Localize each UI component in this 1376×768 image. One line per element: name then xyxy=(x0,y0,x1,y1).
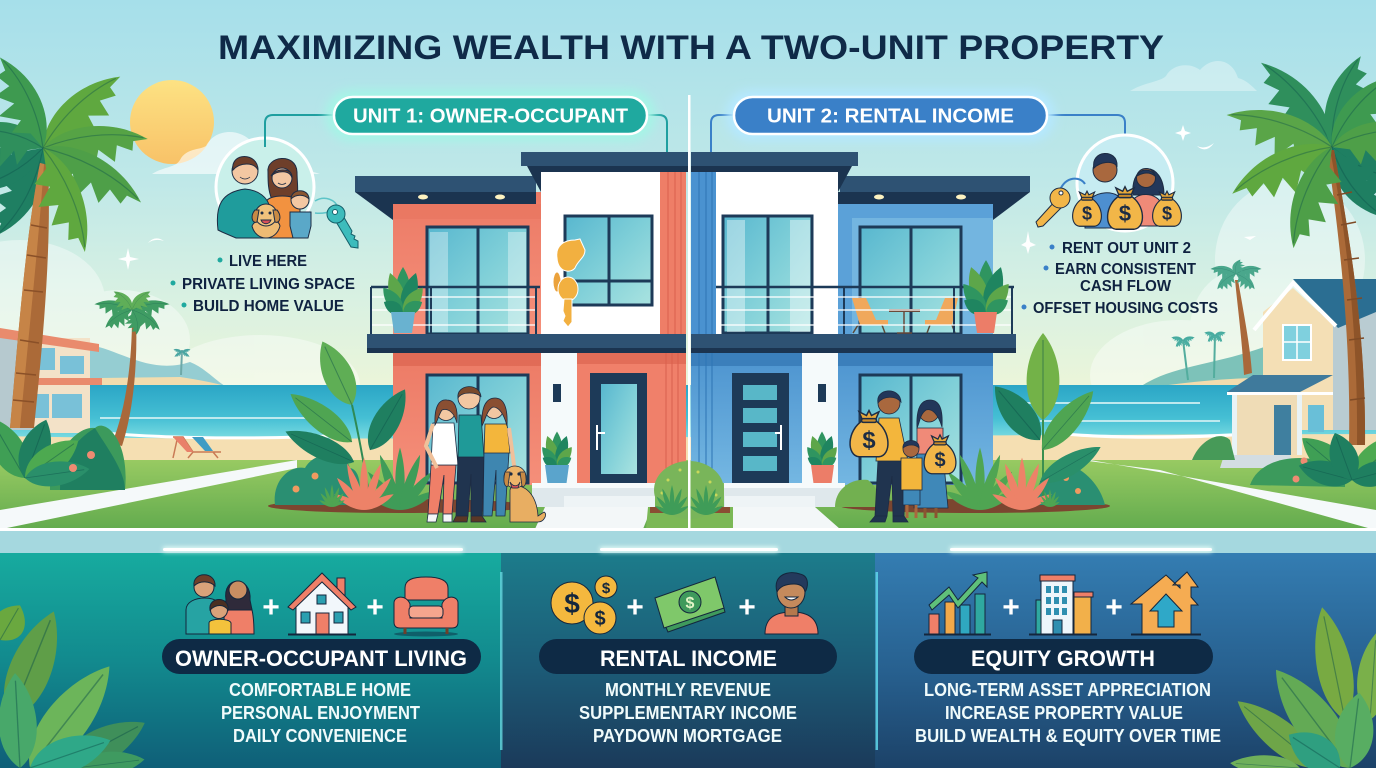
right bag xyxy=(1153,191,1181,226)
ocean xyxy=(0,385,1376,440)
unit 2 walls xyxy=(691,170,993,485)
money bag right xyxy=(924,435,956,474)
right house xyxy=(1220,279,1376,468)
unit 1 entry plant xyxy=(538,432,576,487)
distant hills xyxy=(90,345,1267,392)
callout: unit 1 circle xyxy=(216,138,314,238)
icon: house with up arrow xyxy=(1131,572,1201,634)
unit 1 balcony railing xyxy=(371,287,540,334)
heading pill: owner-occupant living xyxy=(162,639,481,674)
text block: owner benefits xyxy=(221,680,420,746)
plus: + xyxy=(262,591,280,624)
small palm left xyxy=(93,286,171,446)
callout: unit 2 circle xyxy=(1073,135,1173,231)
wall light unit 2 xyxy=(818,384,826,402)
plus: + xyxy=(738,591,756,624)
sun xyxy=(130,80,214,164)
icon: gold key xyxy=(1036,179,1085,227)
unit 2 balcony plant xyxy=(957,260,1015,333)
unit 2 lower window xyxy=(860,375,961,483)
plus: + xyxy=(626,591,644,624)
text block: unit 1 bullets xyxy=(170,253,355,315)
woman portrait right xyxy=(1130,168,1164,226)
label pill: unit 1: UNIT 1: OWNER-OCCUPANT xyxy=(353,106,628,128)
icon: person xyxy=(765,573,818,634)
panel: equity growth xyxy=(875,553,1376,768)
heading pill: rental income: RENTAL INCOME xyxy=(600,646,777,671)
heading pill: equity growth: EQUITY GROWTH xyxy=(971,646,1155,671)
unit 2 upper windows xyxy=(723,216,961,334)
panel: owner-occupant living xyxy=(0,553,501,768)
heading pill: owner-occupant living: OWNER-OCCUPANT LIVING xyxy=(175,646,467,671)
text block: unit 2 bullets: RENT OUT UNIT 2 xyxy=(1062,240,1191,257)
balcony slab xyxy=(367,334,686,353)
panel separators and glow bars xyxy=(163,547,1212,750)
illustration: owner family with dog xyxy=(426,387,546,522)
title: MAXIMIZING WEALTH WITH A TWO-UNIT PROPERTY xyxy=(218,29,1164,67)
text block: equity benefits: BUILD WEALTH & EQUITY OVER TIME xyxy=(915,726,1221,746)
text block: equity benefits: INCREASE PROPERTY VALUE xyxy=(945,703,1183,723)
text block: unit 2 bullets: EARN CONSISTENT xyxy=(1055,261,1196,278)
unit 1 walls xyxy=(393,170,686,485)
beach xyxy=(0,434,1376,470)
unit 1 upper windows xyxy=(427,216,652,334)
unit 2 door xyxy=(732,373,789,483)
golden dog xyxy=(504,466,546,522)
leaves bottom right xyxy=(1228,604,1376,768)
left hotel building xyxy=(0,328,102,433)
big palm left xyxy=(0,49,151,428)
text block: owner benefits: COMFORTABLE HOME xyxy=(229,680,411,700)
text block: equity benefits: LONG-TERM ASSET APPRECIATION xyxy=(924,680,1211,700)
sparkles and birds xyxy=(118,125,1256,270)
background sky xyxy=(0,0,1376,400)
unit 2 balcony railing xyxy=(716,287,1014,334)
woman in coral top xyxy=(914,400,948,518)
label pill: unit 1 xyxy=(326,90,655,141)
plus: + xyxy=(1002,591,1020,624)
text block: unit 1 bullets: PRIVATE LIVING SPACE xyxy=(182,276,355,293)
icon: family xyxy=(186,575,254,634)
plus: + xyxy=(1105,591,1123,624)
child xyxy=(901,440,922,518)
unit 1 balcony plant xyxy=(378,267,428,333)
unit 1 roof xyxy=(355,152,688,220)
icon: banknotes: $ xyxy=(686,595,695,612)
right foreground foliage xyxy=(1192,436,1345,487)
icon: teal key xyxy=(315,198,358,248)
man in yellow shirt xyxy=(870,391,908,522)
panel: house unit 2 xyxy=(691,152,1030,487)
illustration: renter family with money bags xyxy=(850,391,948,522)
icon: banknotes xyxy=(655,577,725,632)
heading pill: equity growth xyxy=(914,639,1213,674)
panel: rental income xyxy=(501,553,875,768)
icon: buildings xyxy=(1029,575,1097,634)
text block: unit 1 bullets: BUILD HOME VALUE xyxy=(193,298,344,315)
leaves bottom left xyxy=(0,598,153,768)
text block: owner benefits: DAILY CONVENIENCE xyxy=(233,726,407,746)
balcony table and chairs xyxy=(852,298,958,333)
label pill: unit 2: UNIT 2: RENTAL INCOME xyxy=(767,106,1014,128)
icon: coins: $ xyxy=(564,588,580,619)
man portrait xyxy=(217,156,270,238)
icon: coins: $ xyxy=(594,608,606,630)
text block: equity benefits xyxy=(915,680,1221,746)
right palm base foliage xyxy=(1293,423,1376,492)
balcony slab xyxy=(691,334,1016,353)
icon: bar chart with arrow xyxy=(924,572,991,634)
unit 1 lower window xyxy=(427,375,528,483)
plus: + xyxy=(366,591,384,624)
icon: coins: $ xyxy=(602,580,611,597)
text block: rental benefits xyxy=(579,680,797,746)
connector lines unit 1 xyxy=(265,115,667,152)
baby portrait xyxy=(290,191,311,238)
unit 2 entry plant xyxy=(803,432,841,487)
planting bed right xyxy=(835,333,1110,514)
grass xyxy=(0,460,1376,530)
text block: rental benefits: PAYDOWN MORTGAGE xyxy=(593,726,782,746)
background clouds xyxy=(0,61,1365,435)
unit 2 roof xyxy=(691,152,1030,220)
left foreground foliage xyxy=(0,410,126,490)
heading pill: rental income xyxy=(539,639,837,674)
text block: unit 2 bullets: CASH FLOW xyxy=(1080,278,1172,295)
text block: owner benefits: PERSONAL ENJOYMENT xyxy=(221,703,420,723)
woman in yellow shirt xyxy=(482,398,516,516)
small palm right xyxy=(1209,258,1263,375)
planting bed left xyxy=(268,335,532,514)
gold key on facade xyxy=(553,239,585,327)
center divider xyxy=(688,95,690,530)
unit 1 door xyxy=(590,373,647,483)
wall light unit 1 xyxy=(553,384,561,402)
dog portrait xyxy=(252,204,280,238)
central bush xyxy=(646,461,733,529)
panel: house unit 1 xyxy=(355,152,688,487)
woman in white shirt xyxy=(426,400,458,522)
icon: coins xyxy=(551,576,617,634)
text block: rental benefits: MONTHLY REVENUE xyxy=(605,680,771,700)
icon: armchair xyxy=(394,577,458,636)
text block: rental benefits: SUPPLEMENTARY INCOME xyxy=(579,703,797,723)
label pill: unit 2 xyxy=(726,90,1055,141)
text block: unit 2 bullets: OFFSET HOUSING COSTS xyxy=(1033,300,1218,317)
entry steps xyxy=(532,483,845,529)
man portrait right xyxy=(1085,153,1124,228)
big palm right xyxy=(1219,50,1376,445)
connector lines unit 2 xyxy=(711,115,1125,152)
money bags xyxy=(850,410,888,457)
woman portrait xyxy=(266,158,300,238)
centre bag xyxy=(1108,187,1142,229)
icon: house xyxy=(288,573,356,634)
text block: unit 1 bullets: LIVE HERE xyxy=(229,253,307,270)
small distant palm left xyxy=(173,348,191,375)
right distant palms xyxy=(1170,330,1227,380)
man in teal shirt xyxy=(453,387,486,522)
divider strip xyxy=(0,528,1376,553)
three money bags xyxy=(1073,191,1101,226)
walkways xyxy=(0,460,1376,528)
text block: unit 2 bullets xyxy=(1022,240,1218,317)
deck chairs xyxy=(173,437,221,458)
